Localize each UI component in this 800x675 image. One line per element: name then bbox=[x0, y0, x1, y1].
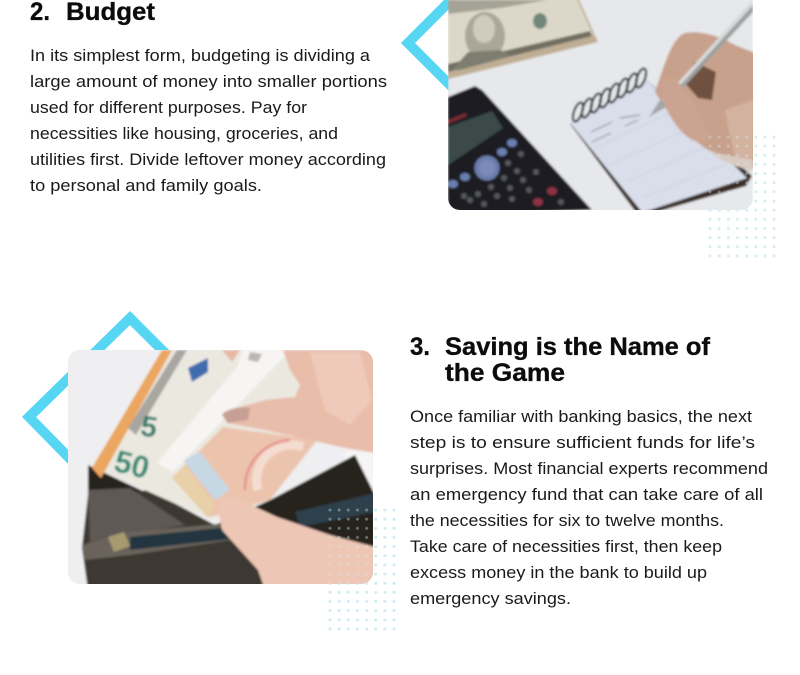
section 2: budget text bbox=[30, 0, 387, 195]
pen bbox=[680, 5, 753, 88]
photo: euro notes and wallet: 50 bbox=[111, 443, 153, 486]
text block: saving description: an emergency fund that can take care of all bbox=[410, 486, 763, 504]
calculator bbox=[448, 86, 592, 215]
bottom hand bbox=[218, 504, 373, 584]
text block: budget description: large amount of money into smaller portions bbox=[30, 73, 387, 91]
heading: 3. Saving is the Name of the Game bbox=[410, 333, 711, 387]
photo: calculator, cash and notepad bbox=[448, 0, 760, 215]
heading: 3. Saving is the Name of the Game: the Game bbox=[445, 359, 565, 387]
wallet bbox=[86, 454, 373, 548]
text block: budget description: to personal and family goals. bbox=[30, 177, 262, 195]
heading: 2. Budget bbox=[30, 0, 156, 26]
index finger bbox=[662, 82, 695, 142]
text block: saving description: step is to ensure sufficient funds for life’s bbox=[410, 434, 755, 452]
heading: 3. Saving is the Name of the Game: 3. bbox=[410, 333, 430, 361]
top hand bbox=[225, 350, 375, 453]
notepad bbox=[570, 80, 752, 215]
hand bbox=[655, 32, 760, 170]
numerals on notes: 5 bbox=[138, 410, 160, 445]
text block: saving description: emergency savings. bbox=[410, 590, 571, 608]
text block: budget description bbox=[30, 47, 387, 195]
heading: 3. Saving is the Name of the Game: Saving is the Name of bbox=[445, 333, 711, 361]
diamond: saving section bbox=[29, 318, 180, 473]
text block: budget description: In its simplest form, budgeting is dividing a bbox=[30, 47, 371, 65]
white folded note bbox=[157, 350, 285, 472]
section 3: saving text bbox=[410, 333, 768, 608]
euro notes bbox=[91, 350, 318, 520]
text block: saving description: excess money in the bank to build up bbox=[410, 564, 707, 582]
spiral binding bbox=[571, 67, 648, 123]
diamond: budget section bbox=[408, 0, 462, 97]
dot pattern: saving photo bbox=[325, 505, 398, 633]
dots over saving photo bbox=[328, 508, 368, 584]
text block: saving description: surprises. Most financial experts recommend bbox=[410, 460, 768, 478]
text block: saving description: Once familiar with banking basics, the next bbox=[410, 408, 752, 426]
photo: euro notes and wallet bbox=[66, 348, 375, 590]
text block: saving description: Take care of necessities first, then keep bbox=[410, 538, 722, 556]
text block: budget description: necessities like housing, groceries, and bbox=[30, 125, 338, 143]
text block: saving description bbox=[410, 408, 768, 608]
text block: budget description: utilities first. Divide leftover money according bbox=[30, 151, 386, 169]
text block: saving description: the necessities for six to twelve months. bbox=[410, 512, 724, 530]
cash stack bbox=[448, 0, 598, 79]
dot pattern: budget photo bbox=[705, 132, 778, 260]
text block: budget description: used for different purposes. Pay for bbox=[30, 99, 308, 117]
dots over budget photo bbox=[708, 136, 748, 194]
